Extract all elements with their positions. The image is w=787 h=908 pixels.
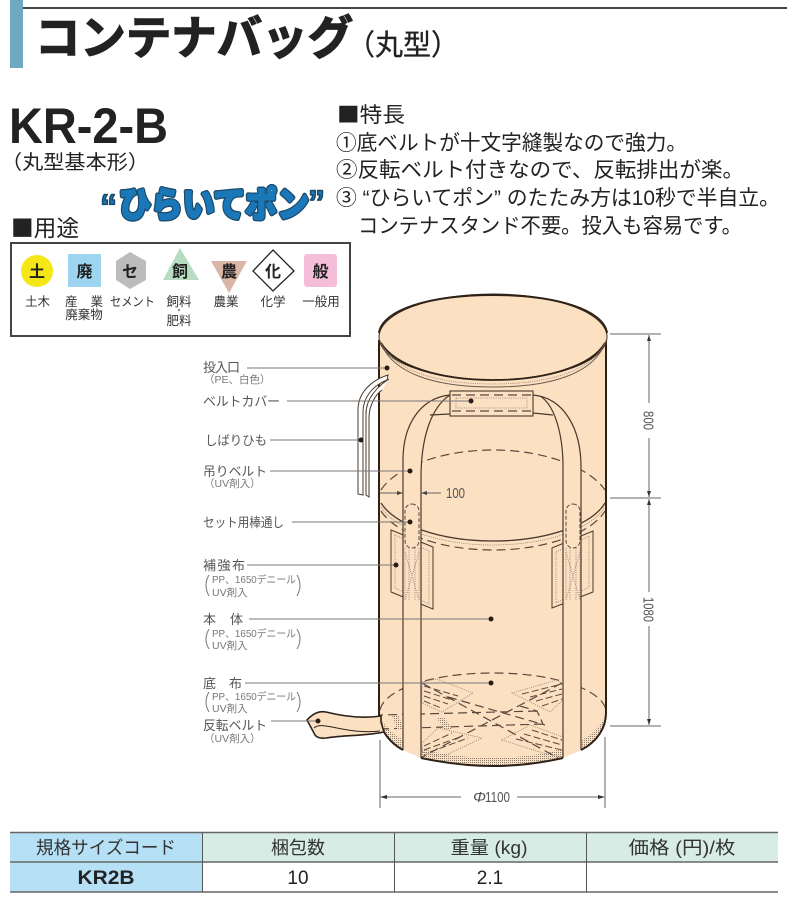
- top opening: [379, 294, 607, 387]
- bag body: [379, 335, 606, 766]
- folding method logo: ”: [308, 184, 325, 222]
- reversal belt: [307, 712, 384, 738]
- icon: civil engineering: [21, 255, 53, 287]
- icon: agriculture: [211, 261, 247, 293]
- feature 3: ③ “ひらいてポン” のたたみ方は10秒で半自立。: [336, 187, 780, 210]
- callout: body: [203, 612, 494, 652]
- dimension: height 800: [610, 334, 661, 498]
- belt cover: [450, 391, 533, 416]
- reinforcement patches: [391, 530, 593, 609]
- use labels: 一般用: [302, 295, 340, 309]
- folding method logo: “: [100, 188, 117, 226]
- table header: 重量 (kg): [450, 838, 528, 858]
- callout: tie string: しばりひも: [205, 433, 267, 448]
- table row: KR2B: [78, 868, 134, 889]
- callout: bottom cloth: UV剤入: [212, 703, 248, 715]
- title header: （丸型）: [347, 29, 459, 62]
- use labels: 土木: [25, 295, 50, 309]
- callout: belt cover: [203, 394, 474, 409]
- callout: bottom cloth: [203, 676, 494, 715]
- use labels: 飼料: [166, 295, 192, 309]
- folding method logo: ひらいてポン: [119, 186, 309, 225]
- stippled base: [379, 713, 606, 766]
- table header: [36, 838, 736, 858]
- callout: lifting belt: 吊りベルト: [203, 464, 267, 479]
- use labels: [25, 294, 340, 328]
- features heading: ■特長: [337, 99, 405, 129]
- callout: reversal belt: （UV剤入）: [204, 733, 261, 745]
- feature 2: ②反転ベルト付きなので、反転排出が楽。: [336, 159, 744, 182]
- bottom cloth: [380, 673, 606, 758]
- spec table: [10, 832, 778, 892]
- icon: general: 般: [312, 263, 329, 281]
- lifting belt right: [533, 395, 581, 758]
- icon: civil engineering: 土: [29, 263, 45, 281]
- icon: chemical: [253, 250, 294, 291]
- callout: inlet: 投入口: [203, 360, 240, 375]
- icon: cement: [116, 252, 146, 289]
- callout: inlet: （PE、白色）: [204, 373, 271, 386]
- uses heading: ■用途: [11, 209, 79, 243]
- icon: general: [304, 254, 337, 287]
- icon: chemical: 化: [265, 263, 281, 281]
- callout: body: PP、1650デニール: [212, 627, 296, 640]
- callout: reinforcement: 補強布: [203, 558, 245, 573]
- callout: body: 本 体: [203, 612, 243, 627]
- use labels: 農業: [213, 294, 239, 309]
- dimension: belt width 100: 100: [446, 485, 465, 502]
- lifting belt left: [403, 395, 450, 758]
- table header: 規格サイズコード: [36, 838, 176, 858]
- feature 1: ①底ベルトが十文字縫製なので強力。: [336, 132, 687, 155]
- dimension: belt width 100: [380, 485, 465, 502]
- icon: industrial waste: [68, 254, 101, 287]
- use labels: 産 業: [65, 294, 103, 309]
- callout: set rod: セット用棒通し: [203, 515, 284, 530]
- use labels: 肥料: [166, 314, 192, 328]
- hidden seam dashed ellipse: [381, 450, 605, 490]
- icon: agriculture: 農: [221, 263, 237, 281]
- callout: reversal belt: 反転ベルト: [203, 718, 267, 733]
- callout: set rod: [203, 515, 412, 530]
- set rod loops: [405, 504, 580, 600]
- table header: 梱包数: [271, 838, 325, 858]
- table row: 2.1: [477, 868, 503, 889]
- callout: lifting belt: （UV剤入）: [204, 478, 261, 490]
- callout: reinforcement: [203, 558, 398, 599]
- callout: reinforcement: PP、1650デニール: [212, 573, 296, 586]
- callout: belt cover: ベルトカバー: [203, 394, 280, 409]
- dimension: diameter 1100: [380, 737, 605, 808]
- folding method logo: ひらいてポン: [119, 186, 309, 225]
- callout: bottom cloth: 底 布: [203, 676, 242, 691]
- use labels: セメント: [110, 295, 155, 309]
- table header: 価格 (円)/枚: [628, 838, 736, 858]
- icon: industrial waste: 廃: [76, 263, 93, 281]
- tie strings: [358, 375, 389, 497]
- features block: [336, 99, 780, 238]
- title header: [10, 0, 787, 68]
- icon: cement: セ: [122, 264, 138, 281]
- table row: [78, 868, 503, 889]
- callout: bottom cloth: PP、1650デニール: [212, 690, 296, 703]
- model subtitle: （丸型基本形）: [1, 151, 149, 174]
- feature 3 continued: コンテナスタンド不要。投入も容易です。: [358, 215, 742, 238]
- use labels: 廃棄物: [65, 308, 103, 322]
- icon: feed: [163, 248, 199, 281]
- callout: body: UV剤入: [212, 640, 248, 652]
- dimension: height 800: 800: [640, 411, 656, 430]
- diagram: container bag: [307, 294, 607, 766]
- callout: tie string: [205, 433, 364, 448]
- panel: uses: [11, 243, 350, 336]
- callout: reversal belt: [203, 718, 320, 745]
- callout: reinforcement: UV剤入: [212, 587, 248, 599]
- table row: 10: [287, 868, 309, 889]
- callout: inlet: [203, 360, 390, 386]
- title header: コンテナバッグ: [35, 12, 353, 64]
- model name: KR-2-B: [9, 98, 168, 154]
- use labels: 化学: [260, 294, 286, 309]
- dimension: height 1080: 1080: [640, 597, 656, 622]
- dimension: height 1080: [610, 499, 661, 726]
- bag outline: [379, 340, 606, 766]
- callouts: [203, 360, 494, 745]
- dimension: diameter 1100: 1100: [485, 789, 510, 806]
- dimension: diameter 1100: Φ: [473, 789, 486, 806]
- icon: feed: 飼: [172, 263, 188, 281]
- middle seam: [381, 503, 605, 541]
- callout: lifting belt: [203, 464, 412, 490]
